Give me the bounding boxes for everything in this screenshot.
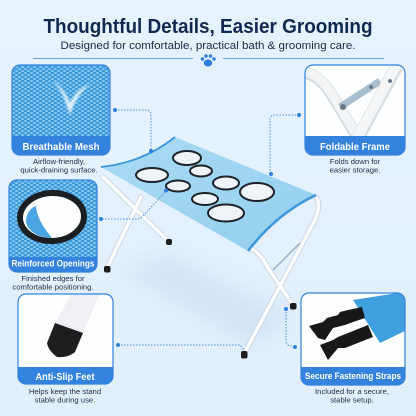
caption: reinforced openings: comfortable positioning. <box>12 282 94 292</box>
caption: foldable frame: easier storage. <box>330 166 380 174</box>
stool leg outlines <box>103 177 318 352</box>
caption: anti-slip feet: Helps keep the stand <box>29 387 101 396</box>
panel: reinforced openings <box>9 180 97 272</box>
stool feet <box>104 239 296 358</box>
seat fabric <box>101 137 316 251</box>
caption: reinforced openings: Finished edges for <box>21 274 85 283</box>
panel: anti-slip feet <box>18 293 113 384</box>
seat openings <box>136 151 274 222</box>
panel: foldable frame: Foldable Frame <box>320 142 390 153</box>
stool legs <box>103 177 318 352</box>
icon: paw <box>201 54 216 67</box>
caption: breathable mesh: Airflow-friendly, <box>33 157 85 166</box>
caption: secure fastening straps: stable setup. <box>330 396 374 404</box>
header rule left <box>33 58 193 59</box>
connector: reinforced openings <box>102 191 166 219</box>
frame tubes <box>303 72 358 138</box>
connector: straps <box>286 309 295 346</box>
connector: breathable mesh <box>115 110 151 150</box>
connector dots: straps <box>284 307 297 349</box>
title: Thoughtful Details, Easier Grooming <box>44 15 372 38</box>
subtitle: Designed for comfortable, practical bath & grooming care. <box>60 40 356 52</box>
stool <box>101 137 318 358</box>
panel: secure fastening straps <box>301 293 405 385</box>
connector dot: anti-slip feet <box>116 343 120 347</box>
connector dots: breathable mesh <box>113 108 153 153</box>
icon: airflow <box>53 81 90 115</box>
connector dots: foldable frame <box>269 113 301 176</box>
caption: breathable mesh: quick-draining surface. <box>20 166 98 174</box>
connector: anti-slip feet <box>118 345 244 350</box>
panel: anti-slip feet: Anti-Slip Feet <box>36 372 95 383</box>
caption: secure fastening straps: Included for a secure, <box>315 387 389 396</box>
folding brace <box>273 243 300 270</box>
connector dots: reinforced openings <box>99 188 168 221</box>
panel: breathable mesh <box>12 65 110 155</box>
panel: reinforced openings: Reinforced Openings <box>12 258 94 270</box>
connector: foldable frame <box>270 115 299 173</box>
panel: foldable frame <box>303 65 405 155</box>
header rule right <box>223 58 384 59</box>
floor shadow <box>120 255 300 345</box>
caption: foldable frame: Folds down for <box>330 157 381 166</box>
caption: anti-slip feet: stable during use. <box>35 396 95 404</box>
panel: secure fastening straps: Secure Fastening Straps <box>305 371 401 382</box>
panel: breathable mesh: Breathable Mesh <box>22 142 100 153</box>
